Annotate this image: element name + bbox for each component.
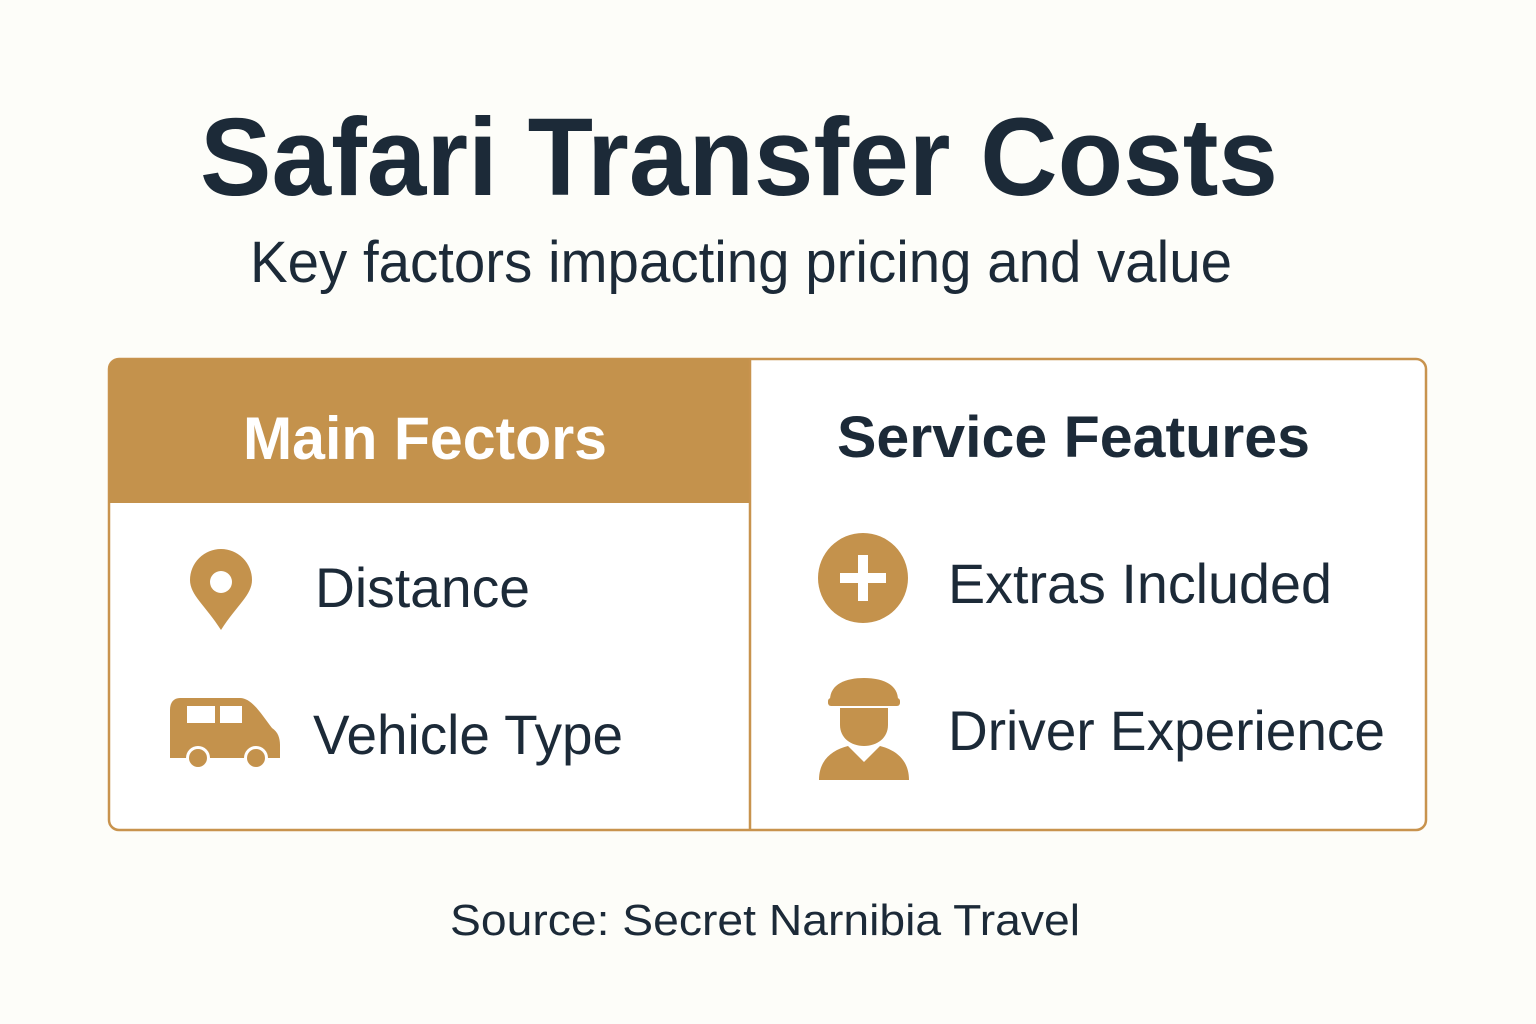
text: distance: Distance (315, 556, 530, 619)
icon: driver (819, 678, 909, 780)
subtitle: Key factors impacting pricing and value (250, 230, 1232, 295)
heading: service features: Service Features (837, 405, 1310, 470)
panel: main factors header: Main Fectors (243, 405, 607, 472)
source: Source: Secret Narnibia Travel (450, 896, 1080, 945)
icon: location pin (190, 549, 252, 630)
text: vehicle type: Vehicle Type (313, 703, 623, 766)
icon: plus circle (818, 533, 908, 623)
panel: comparison table (109, 359, 1426, 830)
icon: van (170, 698, 280, 770)
text: extras included: Extras Included (948, 552, 1332, 615)
panel: main factors header (109, 359, 750, 503)
title: Safari Transfer Costs (200, 96, 1278, 219)
text: driver experience: Driver Experience (948, 699, 1385, 762)
